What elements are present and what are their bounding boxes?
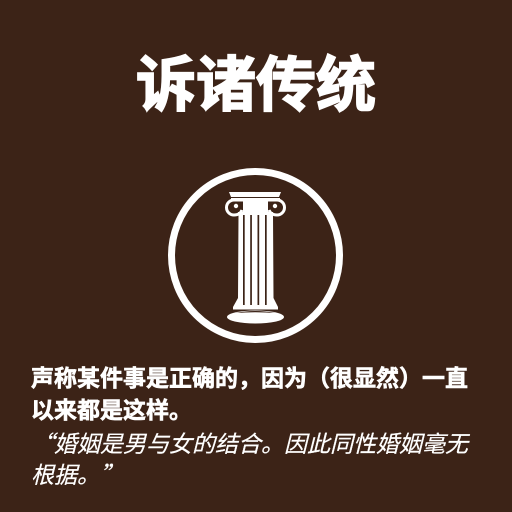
example quote: “婚姻是男与女的结合。因此同性婚姻毫无 — [31, 425, 468, 459]
description text: 以来都是这样。 — [31, 391, 192, 425]
example quote — [31, 425, 470, 490]
icon ring — [172, 172, 340, 340]
column — [226, 192, 284, 324]
description text — [31, 359, 468, 425]
example quote: 根据。” — [31, 456, 123, 490]
description text: 声称某件事是正确的，因为（很显然）一直 — [31, 359, 468, 393]
title: 诉诸传统 — [136, 37, 376, 124]
icon: column in circle — [168, 168, 343, 343]
